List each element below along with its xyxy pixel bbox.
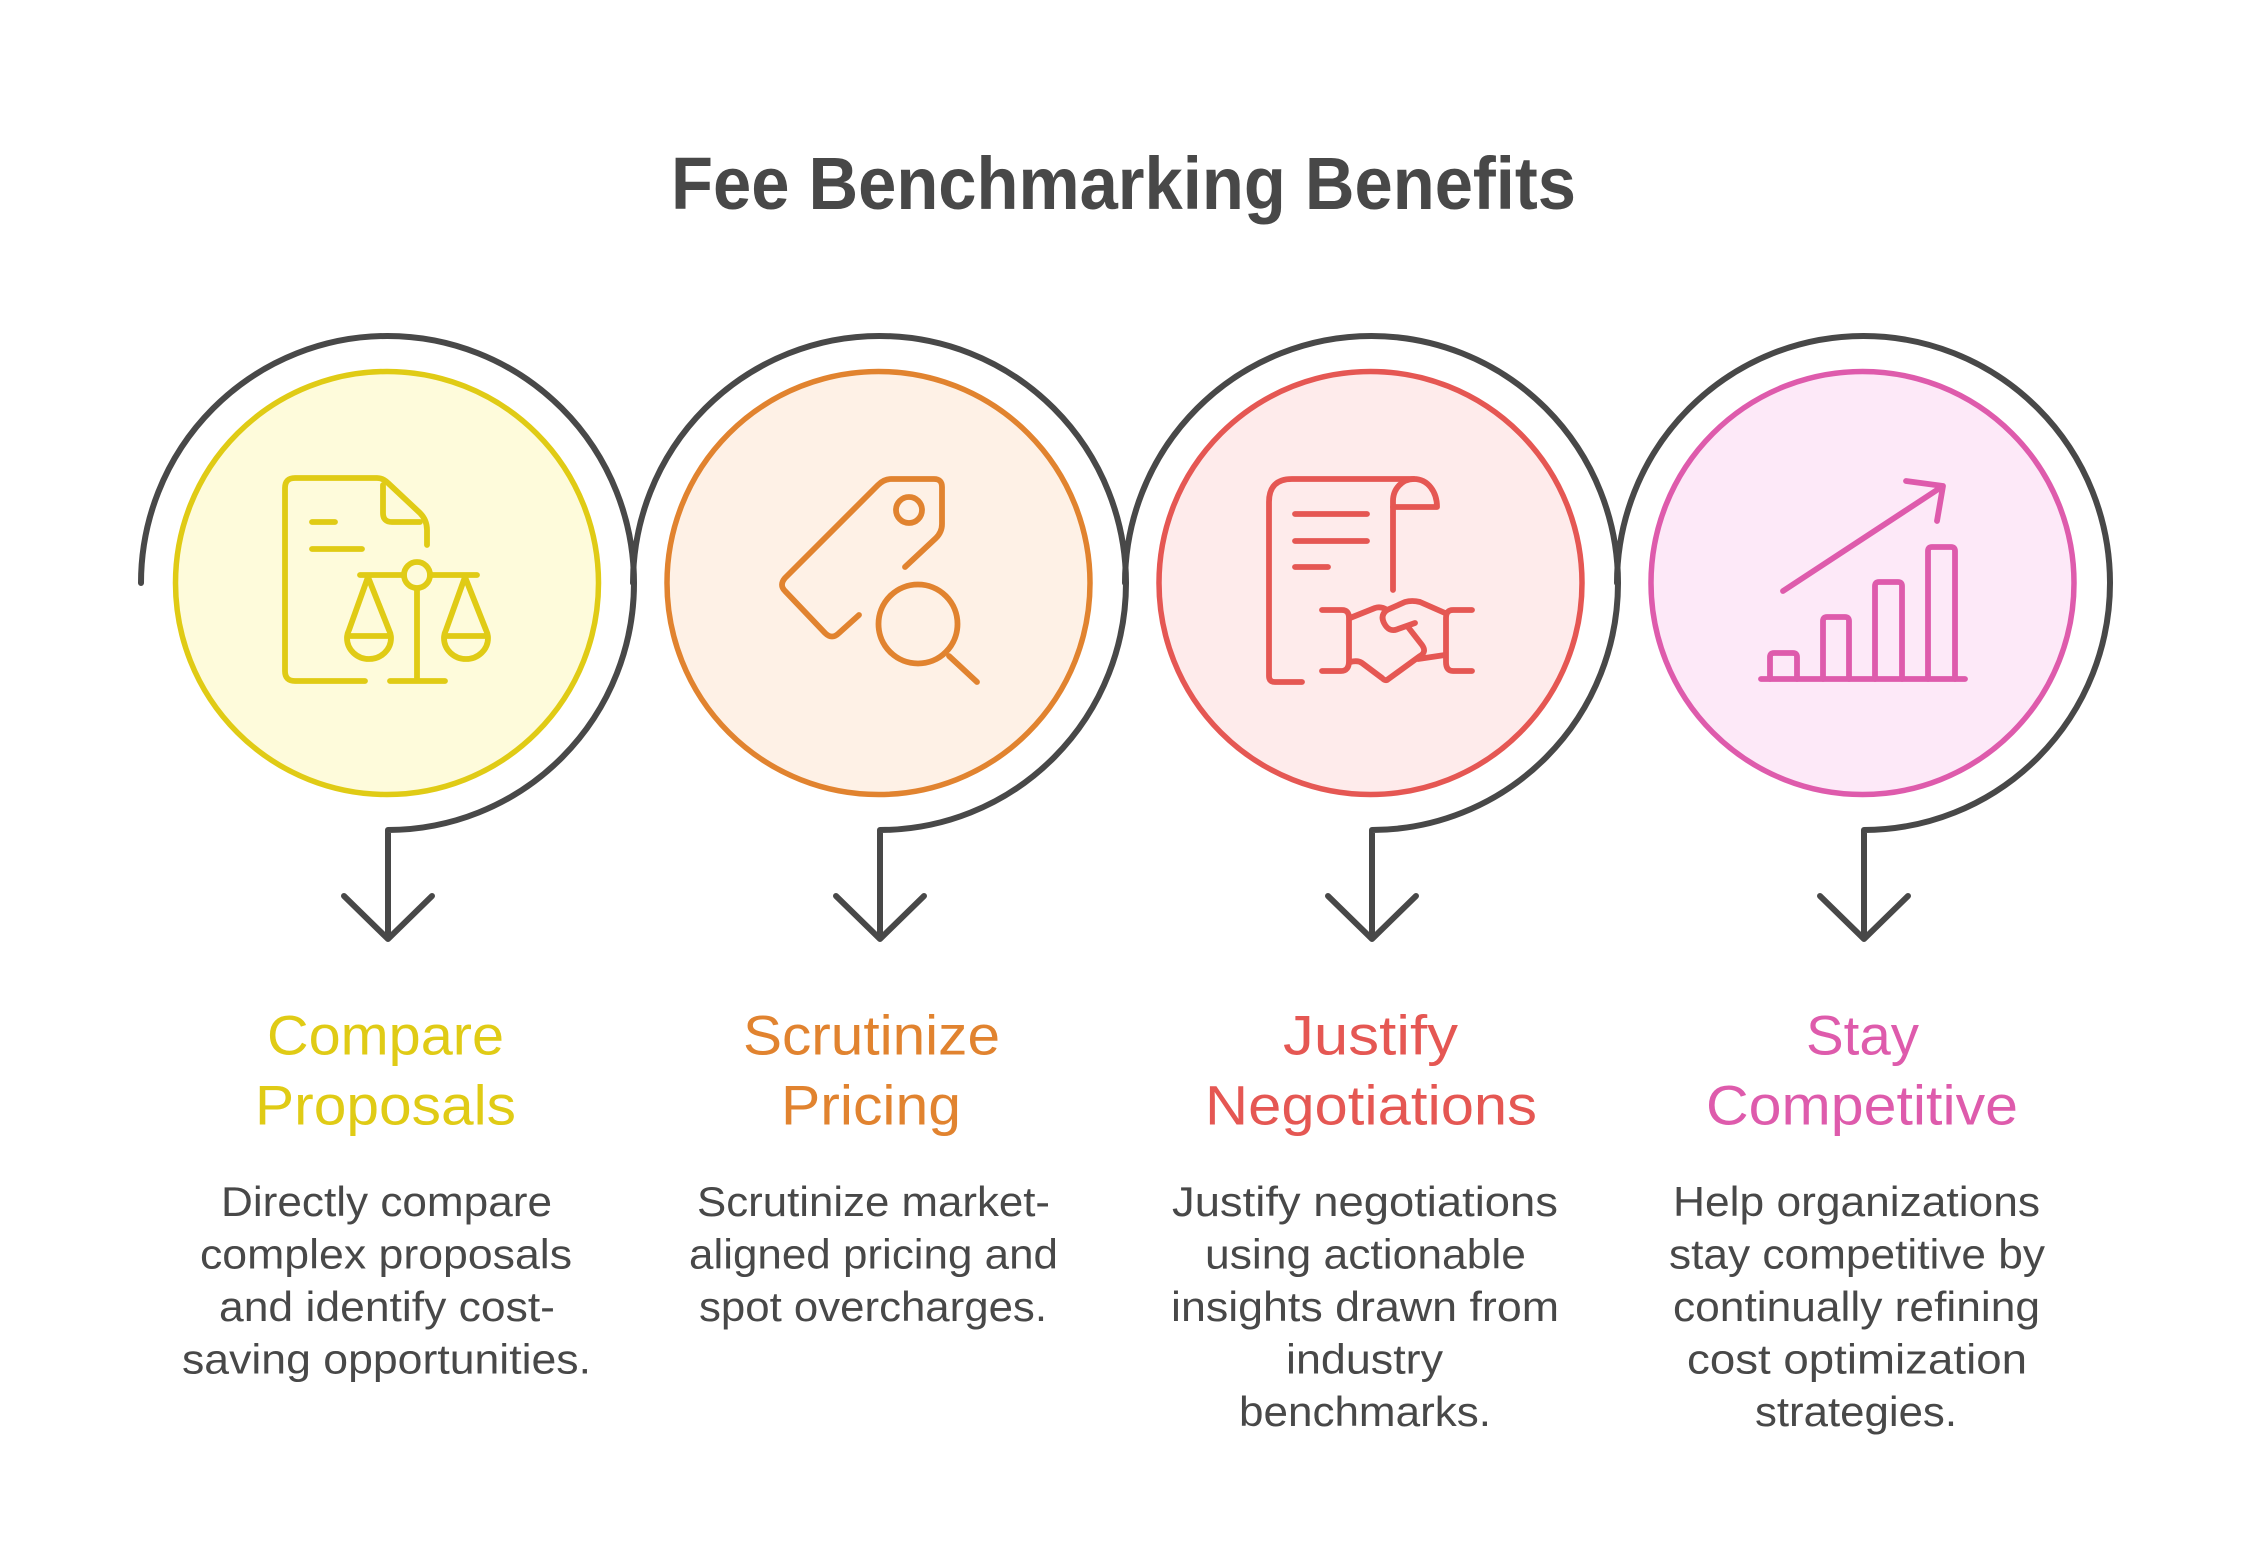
description: aligned pricing and (689, 1230, 1058, 1278)
description (1669, 1178, 2045, 1435)
icon: rising bar chart (1761, 481, 1965, 679)
description: complex proposals (200, 1230, 572, 1278)
description: Directly compare (221, 1178, 552, 1225)
circle badge (667, 372, 1090, 794)
description: saving opportunities. (182, 1336, 591, 1382)
heading (1706, 1004, 2018, 1136)
description: strategies. (1755, 1388, 1957, 1435)
description: insights drawn from (1171, 1283, 1559, 1330)
description: stay competitive by (1669, 1230, 2045, 1278)
heading: Scrutinize (743, 1004, 1000, 1066)
description (182, 1178, 591, 1382)
arrow: ring and down arrow (1125, 336, 1618, 939)
circle badge (1159, 372, 1582, 794)
arrow: ring and down arrow (633, 336, 1126, 939)
description: industry (1286, 1336, 1443, 1382)
heading: Proposals (255, 1074, 516, 1136)
description: benchmarks. (1239, 1388, 1491, 1435)
description: and identify cost- (219, 1283, 555, 1330)
arrow: ring and down arrow (1617, 336, 2110, 939)
icon: contract and handshake (1269, 479, 1472, 682)
description (689, 1178, 1058, 1330)
description: using actionable (1205, 1230, 1526, 1278)
panel: Justify Negotiations (1125, 336, 1618, 1435)
description: spot overcharges. (699, 1283, 1047, 1330)
heading: Pricing (781, 1074, 961, 1136)
panel: Scrutinize Pricing (633, 336, 1126, 1330)
heading: Negotiations (1205, 1074, 1537, 1136)
arrow: ring and down arrow (141, 336, 634, 939)
description: Help organizations (1673, 1178, 2040, 1225)
icon: document and scales (285, 478, 488, 681)
title: Fee Benchmarking Benefits (671, 142, 1576, 225)
heading: Competitive (1706, 1074, 2018, 1136)
heading: Justify (1283, 1004, 1458, 1066)
heading (743, 1004, 1000, 1136)
panel: Compare Proposals (141, 336, 634, 1383)
description: continually refining (1673, 1283, 2040, 1330)
description: Scrutinize market- (697, 1178, 1050, 1225)
circle badge (1651, 372, 2074, 794)
description: Justify negotiations (1172, 1178, 1558, 1225)
heading: Stay (1806, 1004, 1919, 1066)
description: cost optimization (1687, 1336, 2027, 1382)
circle badge (176, 372, 598, 794)
heading (1205, 1004, 1537, 1136)
icon: price tag and magnifier (782, 479, 977, 682)
description (1171, 1178, 1559, 1435)
panel: Stay Competitive (1617, 336, 2110, 1435)
heading (255, 1004, 516, 1136)
heading: Compare (267, 1004, 504, 1066)
